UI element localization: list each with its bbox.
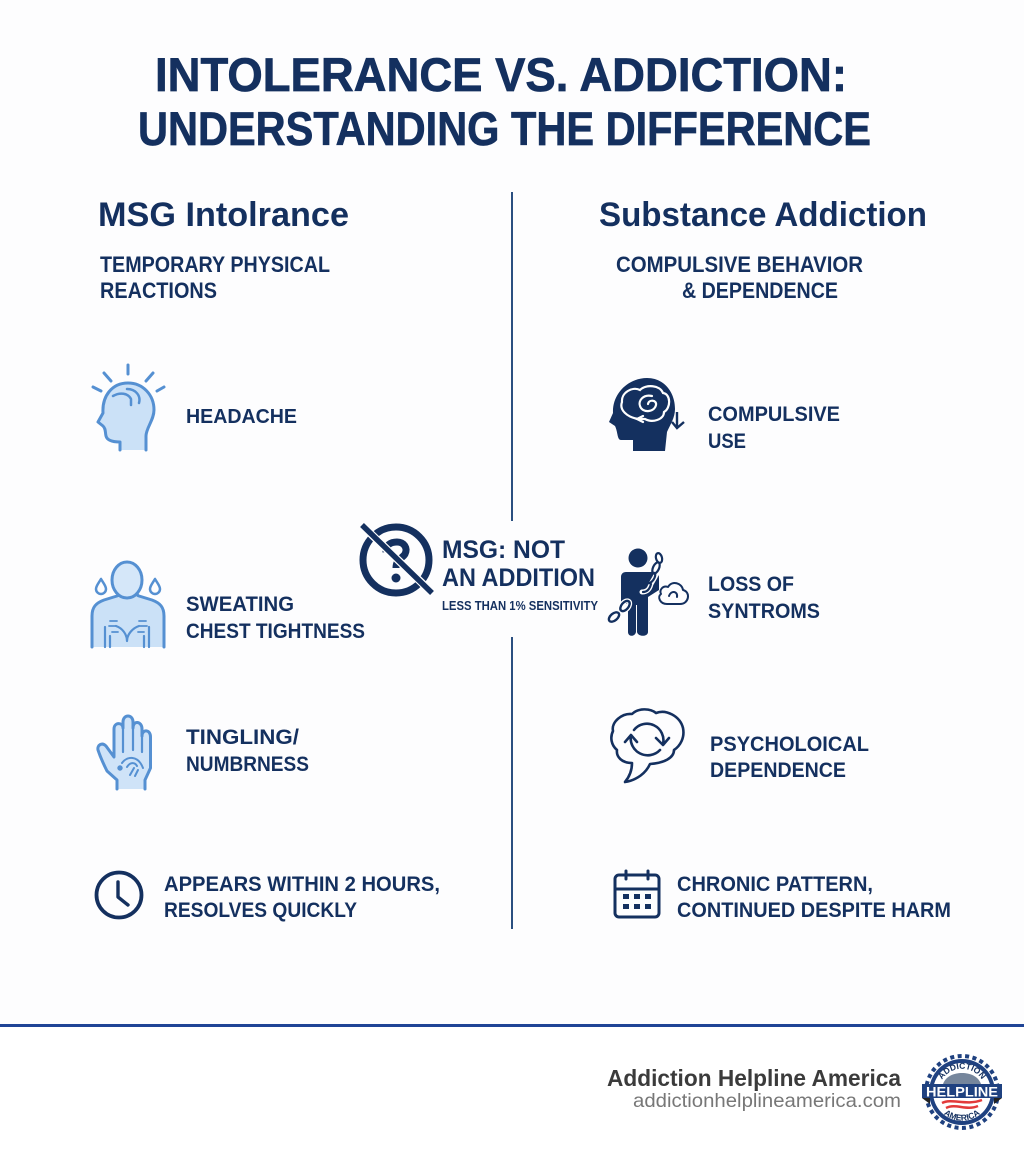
label: loss of symptoms bbox=[708, 573, 820, 623]
label: compulsive use bbox=[708, 403, 840, 453]
icon: brain in head bbox=[609, 378, 684, 451]
title: UNDERSTANDING THE DIFFERENCE bbox=[138, 102, 871, 155]
subheading: compulsive behavior and dependence: & DEPENDENCE bbox=[682, 278, 838, 303]
logo badge: HELPLINE bbox=[926, 1084, 998, 1100]
icon: calendar bbox=[615, 871, 659, 917]
subheading: temporary physical reactions: REACTIONS bbox=[100, 278, 217, 303]
label: sweating, chest tightness: CHEST TIGHTNESS bbox=[186, 620, 365, 643]
title: INTOLERANCE VS. ADDICTION: bbox=[155, 48, 847, 101]
icon: crossed question mark bbox=[362, 525, 432, 593]
footer brand text: addictionhelplineamerica.com bbox=[633, 1090, 901, 1112]
callout text: AN ADDITION bbox=[442, 564, 595, 592]
label: chronic pattern bbox=[677, 873, 951, 922]
label: psychological dependence: PSYCHOLOICAL bbox=[710, 733, 869, 756]
subheading: temporary physical reactions: TEMPORARY PHYSICAL bbox=[100, 252, 330, 277]
label: appears within 2 hours bbox=[164, 873, 440, 922]
footer brand text: Addiction Helpline America bbox=[607, 1065, 901, 1091]
subheading: compulsive behavior and dependence bbox=[616, 252, 863, 303]
icon: thought cloud with cycle arrows bbox=[611, 709, 683, 782]
label: sweating, chest tightness: SWEATING bbox=[186, 593, 294, 616]
footer brand text bbox=[607, 1065, 901, 1112]
subheading: temporary physical reactions bbox=[100, 252, 330, 303]
label: chronic pattern: CHRONIC PATTERN, bbox=[677, 873, 873, 896]
label: chronic pattern: CONTINUED DESPITE HARM bbox=[677, 899, 951, 922]
label: headache: HEADACHE bbox=[186, 405, 297, 428]
callout text: MSG: NOT bbox=[442, 536, 565, 564]
callout: MSG not an addiction bbox=[362, 525, 599, 613]
icon: person with chains bbox=[607, 548, 688, 636]
icon: sweating person bbox=[92, 562, 164, 647]
heading: Substance Addiction: Substance Addiction bbox=[599, 196, 927, 234]
label: loss of symptoms: SYNTROMS bbox=[708, 600, 820, 623]
label: tingling / numbness: TINGLING/ bbox=[186, 726, 299, 749]
label: tingling / numbness bbox=[186, 726, 309, 776]
icon: tingling hand bbox=[98, 716, 150, 789]
label: psychological dependence: DEPENDENCE bbox=[710, 759, 846, 782]
label: tingling / numbness: NUMBRNESS bbox=[186, 753, 309, 776]
center divider bbox=[511, 192, 513, 929]
footer band bbox=[0, 1027, 1024, 1154]
subheading: compulsive behavior and dependence: COMPULSIVE BEHAVIOR bbox=[616, 252, 863, 277]
label: appears within 2 hours: RESOLVES QUICKLY bbox=[164, 899, 357, 922]
label: compulsive use: COMPULSIVE bbox=[708, 403, 840, 426]
label: compulsive use: USE bbox=[708, 430, 746, 453]
icon: clock bbox=[96, 872, 142, 918]
label: loss of symptoms: LOSS OF bbox=[708, 573, 794, 596]
heading: MSG Intolerance: MSG Intolrance bbox=[98, 196, 349, 234]
title bbox=[138, 48, 871, 155]
icon: headache bbox=[93, 365, 164, 450]
label: sweating, chest tightness bbox=[186, 593, 365, 643]
logo badge bbox=[922, 1054, 1002, 1130]
callout text bbox=[442, 536, 599, 613]
callout text: LESS THAN 1% SENSITIVITY bbox=[442, 599, 599, 613]
label: appears within 2 hours: APPEARS WITHIN 2 HOURS, bbox=[164, 873, 440, 896]
footer rule bbox=[0, 1024, 1024, 1027]
logo badge: ADDICTION bbox=[939, 1063, 986, 1080]
label: psychological dependence bbox=[710, 733, 869, 782]
logo badge: AMERICA bbox=[944, 1110, 980, 1121]
